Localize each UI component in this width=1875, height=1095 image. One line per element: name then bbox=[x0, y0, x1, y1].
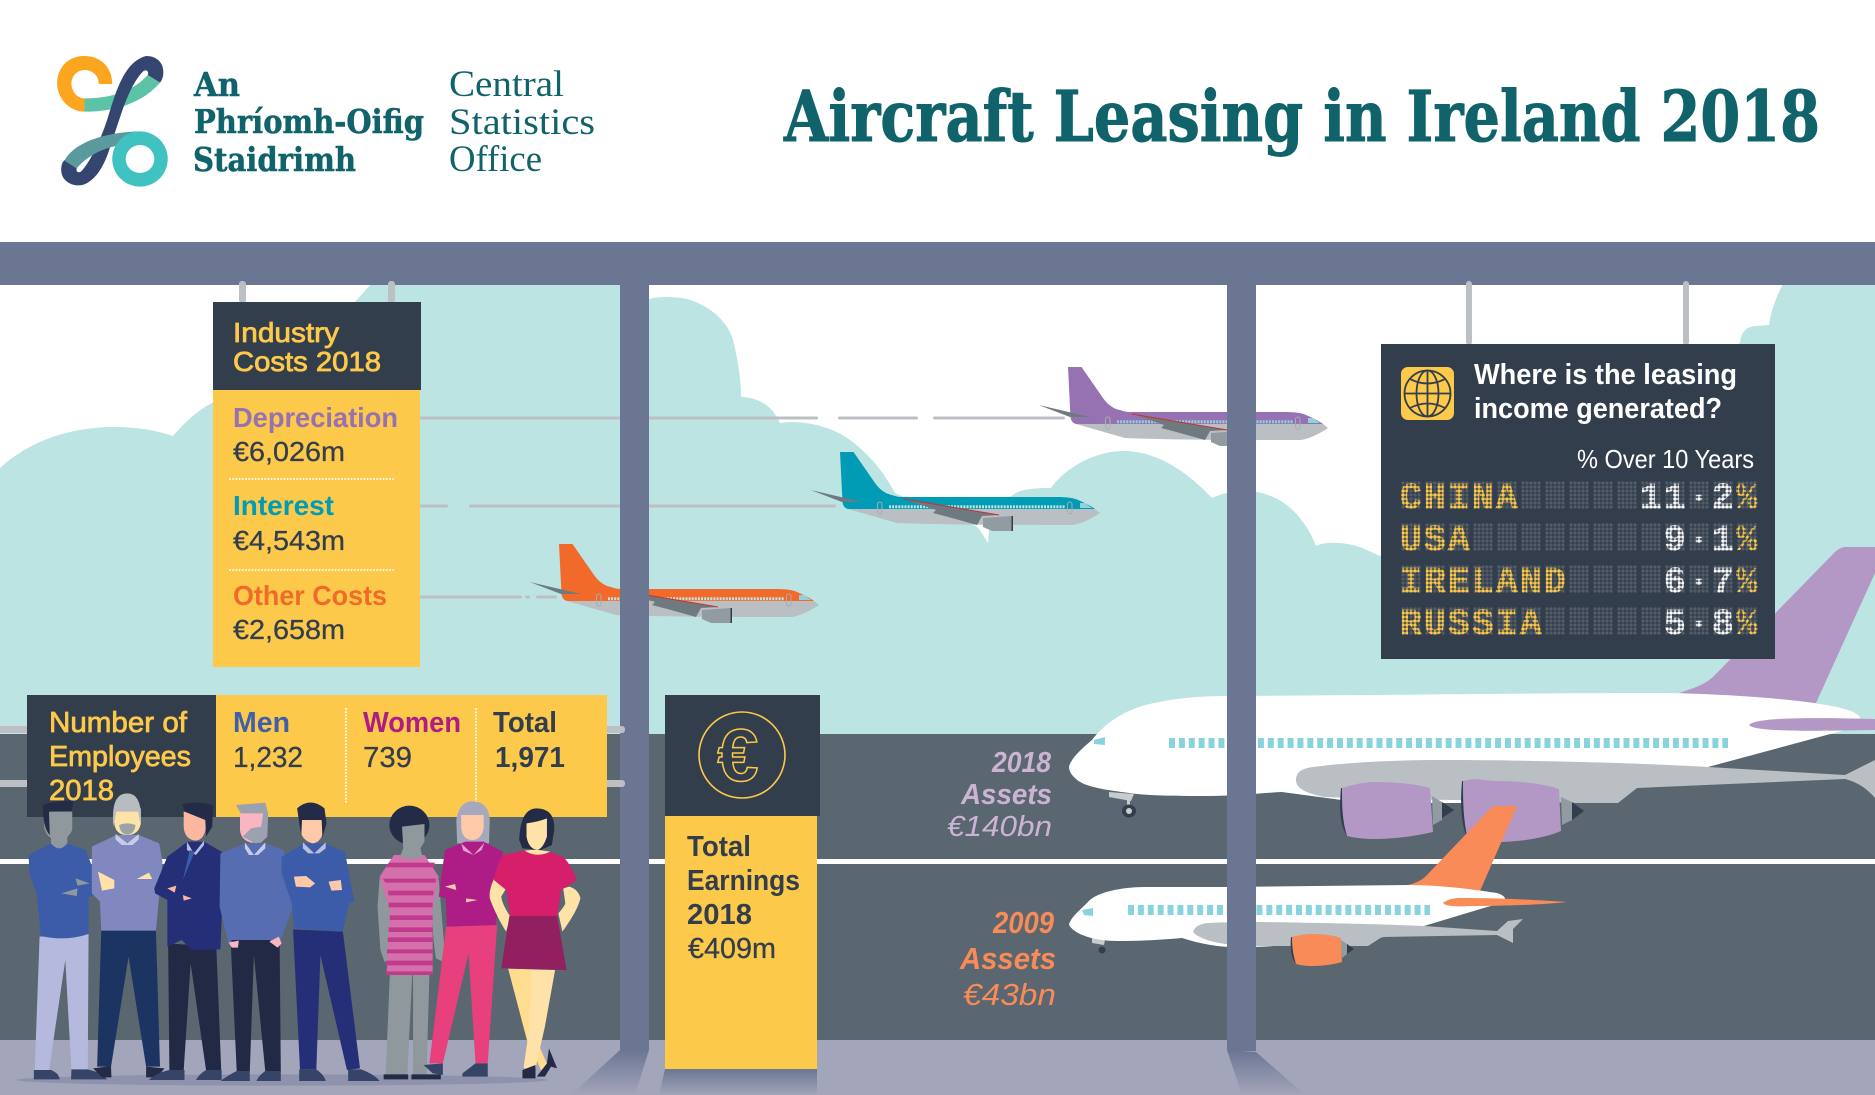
right pillar bbox=[1227, 284, 1305, 1095]
row: USA 9.1%: % bbox=[1736, 520, 1758, 561]
board subheading: % Over 10 Years bbox=[1577, 444, 1754, 474]
earnings text: €409m bbox=[688, 933, 776, 965]
logo name: Irish: An bbox=[193, 65, 240, 104]
2018 assets label bbox=[947, 747, 1052, 843]
interest: Interest bbox=[233, 490, 334, 521]
men count: Men bbox=[233, 707, 290, 739]
logo name: English bbox=[449, 64, 595, 180]
logo name: English: Central bbox=[449, 64, 564, 105]
woman 2 bbox=[424, 801, 503, 1077]
row: China 11.2%: 11 bbox=[1640, 478, 1686, 519]
total count: Total bbox=[493, 707, 557, 739]
row: Russia 5.8%: · bbox=[1688, 604, 1710, 645]
women count: 739 bbox=[363, 742, 412, 774]
2009 assets label bbox=[959, 905, 1056, 1012]
clouds bbox=[0, 284, 1875, 734]
row: Russia 5.8%: 8 bbox=[1712, 604, 1734, 645]
man 5 bbox=[282, 802, 380, 1081]
board heading bbox=[1474, 359, 1737, 425]
logo name: English: Office bbox=[449, 139, 542, 180]
interest bbox=[233, 490, 345, 556]
other costs bbox=[233, 580, 387, 645]
row: Ireland 6.7%: IRELAND bbox=[1400, 562, 1566, 603]
man 1 bbox=[29, 801, 107, 1079]
earnings text: Total bbox=[687, 831, 751, 863]
2009 assets label: 2009 bbox=[992, 905, 1055, 940]
row: Ireland 6.7%: 7 bbox=[1712, 562, 1734, 603]
woman 3 bbox=[490, 808, 580, 1078]
runway line bbox=[0, 859, 1875, 864]
2009 assets label: €43bn bbox=[963, 977, 1056, 1012]
employees heading: Number of bbox=[49, 707, 188, 739]
depreciation: €6,026m bbox=[233, 436, 345, 467]
icon: globe bbox=[1401, 367, 1454, 420]
row: China 11.2%: · bbox=[1688, 478, 1710, 519]
logo name: Irish bbox=[193, 65, 424, 179]
depreciation bbox=[233, 402, 398, 467]
other costs: €2,658m bbox=[233, 614, 345, 645]
industry costs heading: Costs 2018 bbox=[233, 346, 381, 377]
icon: euro coin bbox=[699, 712, 785, 798]
left pillar bbox=[571, 284, 649, 1095]
2018 assets label: Assets bbox=[960, 779, 1052, 811]
teal plane bbox=[811, 452, 1100, 531]
terminal floor bbox=[0, 1040, 1875, 1095]
man 3 bbox=[149, 803, 224, 1080]
women count: Women bbox=[363, 707, 461, 739]
total count bbox=[493, 707, 565, 774]
earnings text: 2018 bbox=[687, 899, 752, 931]
roof beam bbox=[0, 242, 1875, 285]
interest: €4,543m bbox=[233, 525, 345, 556]
depreciation: Depreciation bbox=[233, 402, 398, 433]
contrails bbox=[420, 416, 1065, 598]
purple plane bbox=[1039, 367, 1328, 446]
logo name: English: Statistics bbox=[449, 102, 595, 143]
group of employees bbox=[16, 793, 580, 1086]
industry costs heading bbox=[233, 317, 381, 377]
earnings text: Earnings bbox=[687, 865, 800, 897]
2009 assets label: Assets bbox=[959, 941, 1056, 976]
row: Russia 5.8%: RUSSIA bbox=[1400, 604, 1542, 645]
panel: total earnings bbox=[659, 695, 820, 1095]
2018 assets label: €140bn bbox=[947, 811, 1052, 843]
logo name: Irish: Phríomh-Oifig bbox=[194, 102, 424, 141]
row: USA 9.1%: 1 bbox=[1712, 520, 1734, 561]
man 2 bbox=[92, 793, 164, 1077]
total count: 1,971 bbox=[495, 742, 565, 774]
row: China 11.2% bbox=[1400, 478, 1760, 519]
employees heading: 2018 bbox=[49, 775, 114, 807]
row: China 11.2%: % bbox=[1736, 478, 1758, 519]
earnings text bbox=[687, 831, 800, 965]
panel: number of employees bbox=[27, 695, 607, 817]
row: Ireland 6.7%: · bbox=[1688, 562, 1710, 603]
industry costs heading: Industry bbox=[233, 317, 339, 348]
logo name: Irish: Staidrimh bbox=[193, 140, 356, 179]
logo mark bbox=[57, 56, 168, 187]
row: USA 9.1%: · bbox=[1688, 520, 1710, 561]
row: Ireland 6.7% bbox=[1400, 562, 1760, 603]
panel: industry costs bbox=[213, 302, 421, 667]
tarmac bbox=[0, 734, 1875, 1040]
row: USA 9.1% bbox=[1400, 520, 1760, 561]
row: Ireland 6.7%: % bbox=[1736, 562, 1758, 603]
2018 assets label: 2018 bbox=[991, 747, 1052, 779]
row: Russia 5.8%: 5 bbox=[1664, 604, 1686, 645]
row: Russia 5.8% bbox=[1400, 604, 1760, 645]
small plane: 2009 assets bbox=[1069, 806, 1567, 966]
woman 1 bbox=[378, 806, 444, 1079]
men count bbox=[233, 707, 303, 774]
panel: leasing income departure board bbox=[1381, 344, 1775, 659]
row: China 11.2%: 2 bbox=[1712, 478, 1734, 519]
icon: euro coin: € bbox=[717, 714, 759, 797]
women count bbox=[363, 707, 461, 774]
sign hangers bbox=[0, 281, 1689, 787]
row: Russia 5.8%: % bbox=[1736, 604, 1758, 645]
man 4 bbox=[220, 803, 293, 1081]
employees heading bbox=[49, 707, 191, 807]
other costs: Other Costs bbox=[233, 580, 387, 611]
employees heading: Employees bbox=[49, 741, 191, 773]
men count: 1,232 bbox=[233, 742, 303, 774]
row: USA 9.1%: 9 bbox=[1664, 520, 1686, 561]
large plane: 2018 assets bbox=[1069, 547, 1875, 842]
row: Ireland 6.7%: 6 bbox=[1664, 562, 1686, 603]
row: China 11.2%: CHINA bbox=[1400, 478, 1518, 519]
board heading: income generated? bbox=[1474, 393, 1722, 425]
orange plane bbox=[530, 544, 819, 623]
row: USA 9.1%: USA bbox=[1400, 520, 1470, 561]
board heading: Where is the leasing bbox=[1474, 359, 1737, 391]
